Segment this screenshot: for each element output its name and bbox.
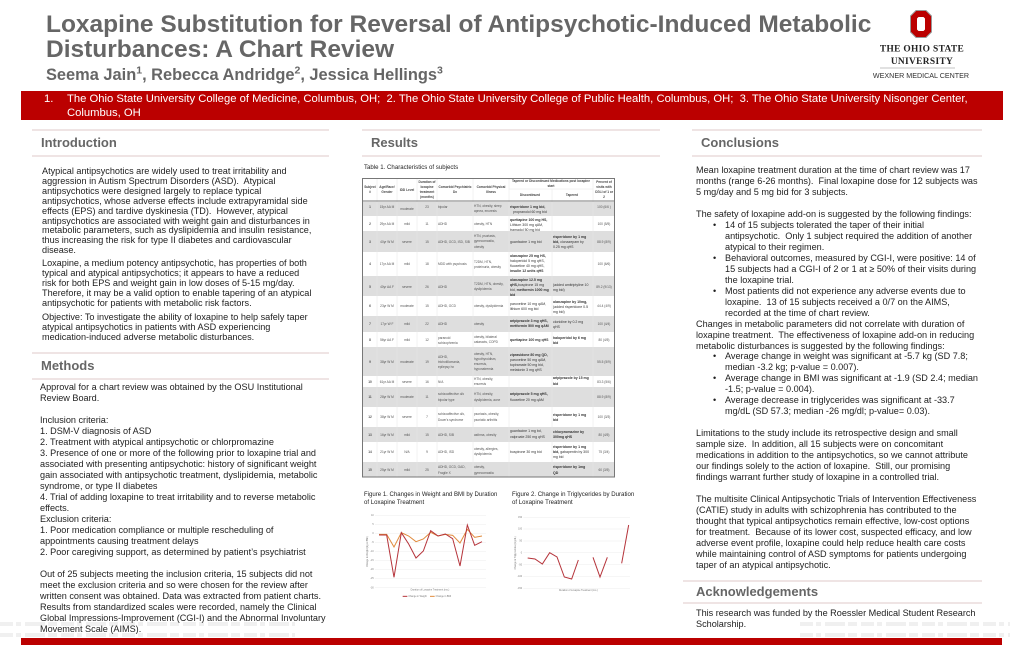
column: discontinued medications: guanfacine 1 mg bid xyxy=(510,240,542,244)
table rows: HTN, obesity, sleep xyxy=(474,204,502,208)
column: discontinued medications: metformin 500 mg qAM xyxy=(510,324,549,328)
text: background: Atypical antipsychotics are widely used to treat irritability and aggression in Autism Spectrum Disorders (ASD). Atypical antipsychotics were designed largely to replace typical antipsychotics, whose adverse effects include extrapyramidal side effects (EPS) and tardive dyskinesia (TD). However, atypical antipsychotics are associated with weight gain and disturbances in metabolic parameters, such as dyslipidemia and insulin resistance, thus increasing the risk for type II diabetes and cardiovascular disease. xyxy=(42,166,311,255)
heading: conclusions: Conclusions xyxy=(701,135,779,150)
text: funding: This research was funded by the Roessler Medical Student Research Scholarship. xyxy=(696,608,976,629)
column: tapered medications: olanzapine by 10mg, xyxy=(553,300,587,304)
figure 2 caption: Figure 2. Change in Triglycerides by Duration of Loxapine Treatment xyxy=(512,491,634,506)
heading: methods xyxy=(32,352,329,380)
table rows: 15 xyxy=(425,433,429,437)
table rows: ADHD, OCD xyxy=(438,304,457,308)
column: tapered medications: risperidone by 1 mg xyxy=(553,235,586,239)
table header: Gender xyxy=(381,190,393,194)
chart: figure 1 line chart of weight and BMI change: Change in Weight (kg or BMI) xyxy=(366,536,369,567)
table rows: bipolar xyxy=(438,205,449,209)
table rows: mild xyxy=(404,262,410,266)
column: discontinued medications: paroxetine 10 mg qAM, xyxy=(510,302,546,306)
text: methods body: Approval for a chart review was obtained by the OSU Institutional Review Board. Inclusion criteria: 1. DSM-V diagnosis of ASD 2. Treatment with atypical antipsychotic or chlorpromazine 3. Presence of one or more of the following prior to loxapine trial and associated with presenting antipsychotic: history of significant weight gain associated with antipsychotic treatment, dyslipidemia, metabolic syndrome, or type II diabetes 4. Trial of adding loxapine to treat irritability and to reverse metabolic effects. Exclusion criteria: 1. Poor medication compliance or multiple rescheduling of appointments causing treatment delays 2. Poor caregiving support, as determined by patient’s psychiatrist Out of 25 subjects meeting the inclusion criteria, 15 subjects did not meet the exclusion criteria and so were chosen for the review after written consent was obtained. Data was extracted from patient charts. Results from standardized scales were recorded, namely the Clinical Global Impressions-Improvement (CGI-I) and the Abnormal Involuntary Movement Scale (AIMS). xyxy=(40,382,326,634)
table header: IDD Level xyxy=(400,188,414,192)
table rows: cataracts, COPD xyxy=(474,340,499,344)
text: conclusions body: • xyxy=(713,286,716,296)
chart: figure 2 line chart of triglyceride change: Change in Triglycerides (mg/dL) xyxy=(514,536,517,570)
chart: figure 2 line chart of triglyceride change: 100 xyxy=(518,529,523,531)
table rows: 19 xyxy=(425,360,429,364)
column: discontinued medications: guanfacine 1 mg bd, xyxy=(510,429,542,433)
column: tapered medications: mg bid) xyxy=(553,288,565,292)
column: tapered medications: mg bid xyxy=(553,455,564,459)
column: discontinued medications: aripiprazole 5 mg qHS, xyxy=(510,392,548,396)
table rows: mild xyxy=(404,433,410,437)
table rows: mild xyxy=(404,468,410,472)
table rows: 15 xyxy=(425,304,429,308)
table rows: psoriatic arthritis xyxy=(474,418,498,422)
chart: figure 1 line chart of weight and BMI change: Change in Weight xyxy=(408,595,427,598)
table rows: 18 xyxy=(425,262,429,266)
heading: introduction: Introduction xyxy=(41,135,117,150)
table rows: 13 xyxy=(368,433,372,437)
heading: methods: Methods xyxy=(41,358,94,373)
text: conclusions body: • xyxy=(713,253,716,263)
table rows: obesity, bilateral xyxy=(474,335,497,339)
table rows: HTN, obesity, xyxy=(474,392,493,396)
panel: methods xyxy=(32,352,329,634)
table rows: 60 (3/5) xyxy=(598,468,610,472)
column: discontinued medications: qHS,buspirone 15 mg xyxy=(510,283,544,287)
table header: Discontinued xyxy=(520,193,540,197)
table rows: 89.2 (9/13) xyxy=(596,285,612,289)
table rows: 7 xyxy=(426,415,428,419)
table rows: obesity, dyslipidemia xyxy=(474,304,503,308)
column: discontinued medications: fluoxetine 40 mg qHS, xyxy=(510,264,544,268)
table rows: HTN, psoriasis, xyxy=(474,234,496,238)
table rows: 38yr W M xyxy=(380,415,394,419)
table rows: 88.9 (8/9) xyxy=(597,395,611,399)
table rows: 17yr W F xyxy=(381,322,394,326)
table header: start xyxy=(548,184,555,188)
table rows: obesity, HTN, xyxy=(474,352,493,356)
table rows: Fragile X xyxy=(438,471,452,475)
table header: Dx xyxy=(453,190,457,194)
table rows: 29yr AA M xyxy=(380,222,395,226)
table rows: asthma, obesity xyxy=(474,433,497,437)
panel: conclusions xyxy=(692,129,982,570)
table rows: 7 xyxy=(369,322,371,326)
column: tapered medications xyxy=(553,235,589,475)
table rows: schizoaffective d/o, xyxy=(438,412,465,416)
table rows: T2DM, HTN, xyxy=(474,260,492,264)
table header: Comorbid Physical xyxy=(477,185,506,189)
table rows: obesity xyxy=(474,322,485,326)
table rows: schizophrenia xyxy=(438,341,458,345)
column: discontinued medications: aripiprazole 3 mg qHS, xyxy=(510,319,548,323)
chart: figure 2 line chart of triglyceride change: 50 xyxy=(519,541,523,543)
table header: Tapered or Discontinued Medications post loxapine xyxy=(512,179,590,183)
table rows: 75 (3/4) xyxy=(598,450,610,454)
table rows: ADHD, ISD xyxy=(438,450,455,454)
table: characteristics of subjects xyxy=(362,178,615,478)
table rows: moderate xyxy=(400,395,414,399)
heading: conclusions xyxy=(692,129,982,157)
table rows: 8 xyxy=(369,338,371,342)
chart: figure 1 line chart of weight and BMI change: -15 xyxy=(370,560,374,562)
table rows: moderate xyxy=(400,360,414,364)
column: tapered medications: clonidine by 0.2 mg xyxy=(553,320,583,324)
table rows: obesity xyxy=(474,245,485,249)
table rows: HTN, obesity, xyxy=(474,377,493,381)
chart: figure 2 line chart of triglyceride change: 0 xyxy=(521,552,523,554)
table rows: 38yr W M xyxy=(380,360,394,364)
column: discontinued medications: Lithium 300 mg qAM, xyxy=(510,223,543,227)
table rows: 12 xyxy=(425,338,429,342)
column: discontinued medications: bid xyxy=(510,293,515,297)
table rows xyxy=(368,204,612,475)
table rows: ADHD, OCD, GAD, xyxy=(438,465,466,469)
chart: figure 1 line chart of weight and BMI change: Change in BMI xyxy=(436,596,451,598)
chart: figure 2 line chart of triglyceride change: Duration of Loxapine Treatment (mo.) xyxy=(559,589,598,592)
column: tapered medications: aripiprazole by 15 mg xyxy=(553,376,589,380)
table rows: 55.5 (5/9) xyxy=(597,360,611,364)
text: conclusions body: • xyxy=(713,351,716,361)
table rows: mild xyxy=(404,322,410,326)
table rows: 6 xyxy=(369,304,371,308)
column: tapered medications: bid xyxy=(553,382,558,386)
chart: figure 2 line chart of triglyceride change: -100 xyxy=(517,576,523,578)
column: tapered medications: haloperidol by 6 mg xyxy=(553,336,586,340)
column: discontinued medications: insulin 12 units qHS xyxy=(510,269,544,273)
table rows: 100 (6/6) xyxy=(598,262,610,266)
table header xyxy=(364,179,614,199)
table rows: 25yr W M xyxy=(380,468,394,472)
panel: introduction xyxy=(32,129,329,342)
wordmark xyxy=(873,44,969,80)
table rows: paranoid xyxy=(438,336,451,340)
chart: figure 2 line chart of triglyceride change: -50 xyxy=(519,564,523,566)
table rows: 2 xyxy=(369,222,371,226)
table header: CGI-I of 1 or xyxy=(595,190,614,194)
table header: # xyxy=(369,190,371,194)
table rows: 22 xyxy=(425,322,429,326)
table rows: Down's syndrome xyxy=(438,418,463,422)
table rows: apnea, enuresis xyxy=(474,209,497,213)
column: tapered medications: (added amitriptyline 10 xyxy=(553,283,588,287)
column: discontinued medications: risperidone 1 mg bid, xyxy=(510,205,545,209)
table header: Tapered xyxy=(566,193,578,197)
panel: acknowledgements xyxy=(683,580,982,629)
heading: introduction xyxy=(32,129,329,157)
table rows: 100 (4/4) xyxy=(598,322,610,326)
table header: Duration of xyxy=(418,180,436,184)
table rows: mild xyxy=(404,338,410,342)
column: discontinued medications: olanzapine 25 mg HS, xyxy=(510,254,546,258)
column: tapered medications: mg bid) xyxy=(553,310,565,314)
table rows: obesity, allergies, xyxy=(474,447,499,451)
table rows: 14 xyxy=(368,450,372,454)
table rows: proteinuria, obesity xyxy=(474,265,501,269)
heading: results: Results xyxy=(371,135,418,150)
column: tapered medications: qHS xyxy=(553,325,560,329)
table rows: 40yr AA F xyxy=(380,285,394,289)
table rows: dyslipidemia, acne xyxy=(474,398,500,402)
column: discontinued medications: ziprasidone 80 mg QD, xyxy=(510,353,548,357)
table header: visits with xyxy=(596,185,612,189)
table rows: 1 xyxy=(369,205,371,209)
table rows: moderate xyxy=(400,304,414,308)
table rows: 80 (4/5) xyxy=(598,338,610,342)
table rows: ADHD xyxy=(438,285,448,289)
column: tapered medications: risperidone by 1 mg xyxy=(553,445,586,449)
table rows: ADHD xyxy=(438,222,448,226)
table rows: dyslipidemia xyxy=(474,452,492,456)
table rows: 10 xyxy=(368,380,372,384)
table rows: ADHD xyxy=(438,322,448,326)
table rows: 16yr W M xyxy=(380,433,394,437)
column: discontinued medications: melatonin 3 mg qHS xyxy=(510,368,542,372)
column: discontinued medications: lithium 600 mg bid xyxy=(510,307,538,311)
table rows: trichotillomania, xyxy=(438,360,460,364)
table rows: severe xyxy=(402,415,412,419)
column: discontinued medications: fluoxetine 20 mg qAM xyxy=(510,398,544,402)
chart: figure 2 line chart of triglyceride change xyxy=(514,516,630,592)
table header: Percent of xyxy=(596,180,613,184)
table header: Subject xyxy=(364,185,377,189)
column: discontinued medications: tramadol 50 mg bid xyxy=(510,228,540,232)
table rows: 15 xyxy=(425,240,429,244)
table rows: 88.9 (8/9) xyxy=(597,240,611,244)
column: discontinued medications: propranolol 60 mg bid xyxy=(513,210,547,214)
chart: figure 1 line chart of weight and BMI change: 0 xyxy=(372,533,374,535)
column: tapered medications: 300mg qHS xyxy=(553,435,573,439)
column: tapered medications: risperidone by 1 mg xyxy=(553,413,586,417)
table rows: severe xyxy=(402,285,412,289)
table rows: 100 (3/3) xyxy=(598,415,610,419)
table rows: dyslipidemia xyxy=(474,287,492,291)
text: loxapine: Loxapine, a medium potency antipsychotic, has properties of both typical and atypical antipsychotics; it appears to have a reduced risk for both EPS and weight gain in low doses of 5-15 mg/day. Therefore, it may be a valid option to enable tapering of an atypical antipsychotic for patients with metabolic risk factors. xyxy=(42,258,311,308)
table rows: 16 xyxy=(425,380,429,384)
column: discontinued medications: bid, metformin 1000 mg xyxy=(510,288,549,292)
table rows: 40yr W M xyxy=(380,240,394,244)
table rows: gynecomastia, xyxy=(474,239,495,243)
table rows: 11 xyxy=(425,395,429,399)
table rows: 15 xyxy=(368,468,372,472)
column: discontinued medications: quetiapine 100 mg HS, xyxy=(510,218,547,222)
column: tapered medications: risperidone by 1mg xyxy=(553,465,585,469)
table rows: 61yr AA M xyxy=(380,380,395,384)
table rows: 28yr W M xyxy=(380,395,394,399)
table rows: moderate xyxy=(400,207,414,211)
table rows: ADHD, OCD, ISD, SIB xyxy=(438,240,470,244)
table rows: 17yr AA M xyxy=(380,262,395,266)
column: tapered medications: (added risperidone 0.5 xyxy=(553,305,588,309)
column: discontinued medications: quetiapine 100 mg qHS xyxy=(510,338,549,342)
table rows: 44.4 (4/9) xyxy=(597,304,611,308)
chart: figure 1 line chart of weight and BMI change: -25 xyxy=(370,578,374,580)
table header: (months) xyxy=(420,195,434,199)
column: tapered medications: 0.25 mg qHS xyxy=(553,245,574,249)
text: objective: Objective: To investigate the ability of loxapine to help safely taper atypical antipsychotics in patients with ASD experiencing medication-induced adverse metabolic disturbances. xyxy=(42,312,308,342)
chart: figure 1 line chart of weight and BMI change: Duration of Loxapine Treatment (mo.) xyxy=(411,588,450,591)
heading: results xyxy=(362,129,660,157)
table rows: obesity, HTN xyxy=(474,222,493,226)
column: discontinued medications: olanzapine 12.5 mg xyxy=(510,278,542,282)
table rows: N/A xyxy=(404,450,411,454)
logo: Ohio State University Wexner Medical Center xyxy=(872,10,969,80)
affiliations banner: The Ohio State University College of Medicine, Columbus, OH; 2. The Ohio State University College of Public Health, Columbus, OH; 3. The Ohio State University Nisonger Center, Columbus, OH xyxy=(67,92,968,118)
text: conclusions body: • xyxy=(713,373,716,383)
chart: figure 1 line chart of weight and BMI change: 5 xyxy=(372,524,374,526)
table rows: enuresis, xyxy=(474,362,487,366)
title: Loxapine Substitution for Reversal of Antipsychotic-Induced Metabolic Disturbances: A Chart Review xyxy=(46,11,871,63)
text: conclusions body: Mean loxapine treatment duration at the time of chart review was 17 months (range 6-26 months). Final loxapine dose for 12 subjects was 5 mg/day and 5 mg bid for 3 subjects. The safety of loxapine add-on is suggested by the following findings: 14 of 15 subjects tolerated the taper of their initial antipsychotic. Only 1 subject required the addition of another atypical to their regimen. Behavioral outcomes, measured by CGI-I, were positive: 14 of 15 subjects had a CGI-I of 2 or 1 at ≥ 50% of their visits during the loxapine trial. Most patients did not experience any adverse events due to loxapine. 13 of 15 subjects received a 0/7 on the AIMS, recorded at the time of chart review. Changes in metabolic parameters did not correlate with duration of loxapine treatment. The effectiveness of loxapine add-on in reducing metabolic disturbances is suggested by the following findings: Average change in weight was significant at -5.7 kg (SD 7.8; median -3.2 kg; p-value = 0.007). Average change in BMI was significant at -1.9 (SD 2.4; median -1.5; p-value = 0.004). Average decrease in triglycerides was significant at -33.7 mg/dL (SD 57.3; median -26 mg/dl; p-value= 0.03). Limitations to the study include its retrospective design and small sample size. In addition, all 15 subjects were on concomitant medications in addition to the antipsychotics, so we cannot attribute our findings solely to the action of loxapine. Still, our promising findings warrant further study of loxapine in a controlled trial. The multisite Clinical Antipsychotic Trials of Intervention Effectiveness (CATIE) study in adults with schizophrenia has contributed to the thought that typical antipsychotics remain effective, low-cost options for treatment. Because of its lower cost, suspected efficacy, and low adverse event profile, loxapine could help reduce health care costs while maintaining control of ASD symptoms for patients undergoing taper of an atypical antipsychotic. xyxy=(696,165,978,570)
table rows: mild xyxy=(404,222,410,226)
authors: Seema Jain1, Rebecca Andridge2, Jessica Hellings3 xyxy=(46,65,443,84)
chart: figure 1 line chart of weight and BMI change xyxy=(366,514,486,598)
text: conclusions body: • xyxy=(713,220,716,230)
column: discontinued medications: haloperidol 5 mg qHS, xyxy=(510,259,545,263)
chart: figure 1 line chart of weight and BMI change: 10 xyxy=(371,515,374,517)
table rows: obesity, xyxy=(474,465,485,469)
icon: block O xyxy=(910,10,932,38)
table header: Comorbid Psychiatric xyxy=(439,185,472,189)
table rows: enuresis xyxy=(474,382,486,386)
affiliations banner: 1. xyxy=(44,92,53,104)
table rows: 56yr AA F xyxy=(380,338,394,342)
column: discontinued medications: valproate 250 mg qHS xyxy=(510,435,545,439)
chart: figure 2 line chart of triglyceride change: -150 xyxy=(517,588,523,590)
table rows: severe xyxy=(402,380,412,384)
chart: figure 1 line chart of weight and BMI change: -10 xyxy=(370,551,374,553)
table rows: 9 xyxy=(369,360,371,364)
table rows: 100 (6/6 ) xyxy=(597,205,611,209)
table rows: 5 xyxy=(369,285,371,289)
table rows: 80 (4/5) xyxy=(598,433,610,437)
table rows: 9 xyxy=(426,450,428,454)
table rows: 4 xyxy=(369,262,371,266)
table rows: schizoaffective d/o xyxy=(438,392,464,396)
table rows: hyponatremia xyxy=(474,367,494,371)
table rows: 23yr W M xyxy=(380,304,394,308)
table header: 2 xyxy=(603,195,605,199)
table rows: psoriasis, obesity, xyxy=(474,412,499,416)
table rows: T2DM, HTN, obesity, xyxy=(474,282,504,286)
panel: results xyxy=(362,129,660,598)
table rows: 25 xyxy=(425,468,429,472)
table rows: N/A xyxy=(438,380,444,384)
table rows: epilepsy hx xyxy=(438,365,454,369)
table rows: 15yr AA M xyxy=(380,205,395,209)
text: conclusions body: • xyxy=(713,395,716,405)
table rows: 23 xyxy=(425,205,429,209)
table header: treatment xyxy=(420,190,435,194)
table rows: bipolar type xyxy=(438,398,455,402)
column: tapered medications: bid xyxy=(553,418,558,422)
table rows: MDD with psychosis xyxy=(438,262,467,266)
table rows: 3 xyxy=(369,240,371,244)
table rows: gynecomastia xyxy=(474,471,494,475)
figure 1 caption: Figure 1. Changes in Weight and BMI by Duration of Loxapine Treatment xyxy=(364,492,497,506)
table caption: Table 1. Characteristics of subjects xyxy=(364,164,458,171)
chart: figure 2 line chart of triglyceride change: 150 xyxy=(518,517,523,519)
table rows: 83.3 (5/6) xyxy=(597,380,611,384)
table rows: 100 (5/5) xyxy=(598,222,610,226)
footer bar xyxy=(21,638,1002,645)
table rows: 21yr W M xyxy=(380,450,394,454)
column: tapered medications: bid, gabapentin by 300 xyxy=(553,450,589,454)
table rows: 12 xyxy=(368,415,372,419)
table rows: 11 xyxy=(368,395,372,399)
column: discontinued medications: buspirone 30 mg bid xyxy=(510,450,542,454)
column: discontinued medications xyxy=(510,205,549,454)
table rows: 11 xyxy=(425,222,429,226)
table header: loxapine xyxy=(421,185,434,189)
chart: figure 1 line chart of weight and BMI change: -30 xyxy=(370,587,374,589)
wordmark: WEXNER MEDICAL CENTER xyxy=(873,72,969,80)
table rows: 26 xyxy=(425,285,429,289)
column: tapered medications: QD xyxy=(553,471,559,475)
heading: acknowledgements xyxy=(683,580,982,604)
column: discontinued medications: paroxetine 50 mg qAM, xyxy=(510,358,546,362)
table rows: severe xyxy=(402,240,412,244)
chart: figure 1 line chart of weight and BMI change: -20 xyxy=(370,569,374,571)
table rows: ADHD, xyxy=(438,355,448,359)
chart: figure 1 line chart of weight and BMI change: -5 xyxy=(372,542,374,544)
column: discontinued medications: topiramate 50 mg bid, xyxy=(510,363,544,367)
column: tapered medications: bid, clonazepam by xyxy=(553,240,584,244)
table header: Age/Race/ xyxy=(379,185,395,189)
wordmark: THE OHIO STATE xyxy=(880,44,964,54)
column: tapered medications: chlorpromazine by xyxy=(553,430,584,434)
heading: acknowledgements: Acknowledgements xyxy=(696,584,818,599)
table header: Illness xyxy=(486,190,496,194)
wordmark: UNIVERSITY xyxy=(891,57,953,67)
table rows: hypothyroidism, xyxy=(474,357,496,361)
table rows: ADHD, SIB xyxy=(438,433,454,437)
column: tapered medications: bid xyxy=(553,341,558,345)
